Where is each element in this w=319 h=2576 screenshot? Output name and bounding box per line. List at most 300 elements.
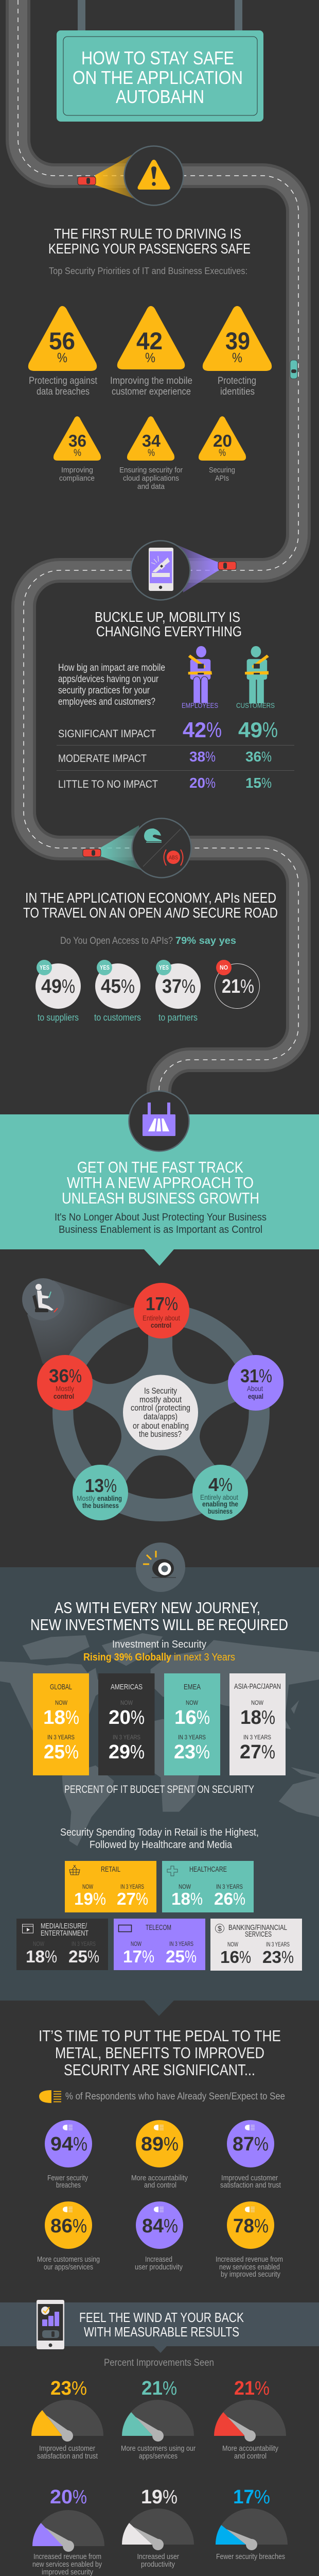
priority: data breaches: data breaches — [37, 386, 90, 397]
benefit: fewer breaches — [45, 2120, 92, 2190]
card: global: NOW — [55, 1699, 68, 1706]
title: AUTOBAHN — [116, 86, 204, 107]
heading: first rule — [48, 226, 251, 257]
table: impact: 38 — [189, 749, 205, 765]
subheading: enablement: It's No Longer About Just Protecting Your Business — [55, 1212, 267, 1223]
stat: partners: to partners — [158, 1012, 198, 1023]
headlight beam: purple — [178, 545, 219, 592]
node: entirely enabling: enabling the — [202, 1500, 238, 1508]
card: global — [33, 1673, 89, 1775]
card: telecom: 17 — [123, 1947, 142, 1966]
question: API access: Do You Open Access to APIs? — [60, 936, 173, 946]
card: media: MEDIA/LEISURE/ — [41, 1922, 87, 1930]
card: banking: % — [239, 1947, 251, 1967]
car: red — [78, 177, 96, 185]
caption: percent of IT budget: PERCENT OF IT BUDGET SPENT ON SECURITY — [64, 1784, 254, 1795]
subheading: investment: Rising 39% Globally — [83, 1652, 172, 1663]
car: red heading left — [218, 562, 236, 570]
gauge: user productivity — [122, 2486, 194, 2569]
benefit: accountability: 89 — [141, 2133, 164, 2155]
benefit: productivity: Increased — [145, 2255, 172, 2264]
card: global: IN 3 YEARS — [47, 1734, 75, 1741]
heading: APIs: IN THE APPLICATION ECONOMY, APIs NEED — [25, 890, 276, 906]
card: healthcare: HEALTHCARE — [189, 1865, 227, 1874]
car: teal — [290, 360, 297, 379]
card: retail: % — [136, 1889, 148, 1908]
card: americas: NOW — [120, 1699, 133, 1706]
title sign — [57, 0, 263, 122]
priority: data breaches: 56 — [49, 327, 75, 354]
gauge: fewer breaches: % — [254, 2486, 270, 2508]
benefit: productivity: user productivity — [135, 2263, 183, 2272]
stat: suppliers: 49 — [41, 976, 62, 997]
heading: pedal to the metal: IT’S TIME TO PUT THE PEDAL TO THE — [39, 2027, 281, 2045]
node: entirely enabling: 4 — [208, 1474, 219, 1495]
card: banking: NOW — [227, 1941, 238, 1948]
question text — [58, 663, 165, 707]
priority: APIs: Securing — [209, 466, 235, 474]
subheading: retail spending — [60, 1827, 259, 1851]
subheading: retail spending: Security Spending Today in Retail is the Highest, — [60, 1827, 259, 1838]
benefit: revenue: 78 — [233, 2215, 254, 2237]
card: Asia-Pac: 27 — [240, 1741, 261, 1763]
benefit: more customers: our apps/services — [44, 2263, 93, 2272]
subheading: enablement: Business Enablement is as Important as Control — [59, 1224, 262, 1235]
heading: first rule: THE FIRST RULE TO DRIVING IS — [54, 226, 241, 242]
card: americas: % — [131, 1707, 145, 1728]
heading: APIs — [23, 890, 278, 921]
gauge: fewer breaches — [216, 2486, 288, 2561]
legend: employees: EMPLOYEES — [182, 701, 218, 709]
card: healthcare: % — [190, 1889, 203, 1908]
gauge: customer satisfaction: Improved customer — [39, 2444, 95, 2453]
heading: fast track: UNLEASH BUSINESS GROWTH — [62, 1189, 259, 1207]
priority: APIs: APIs — [215, 474, 229, 483]
panel: investment band — [0, 1567, 319, 2001]
gauge: accountability — [214, 2378, 286, 2461]
priority: identities: 39 — [225, 327, 250, 354]
node: mostly enabling: enabling — [97, 1494, 122, 1502]
hub question: control (protecting — [131, 1403, 190, 1413]
card: global: 18 — [43, 1707, 65, 1728]
card: telecom: NOW — [131, 1940, 141, 1947]
node: mostly enabling: Mostly — [77, 1494, 95, 1502]
heading: fast track — [62, 1158, 259, 1207]
card: telecom: % — [142, 1947, 154, 1966]
gauge: more customers — [121, 2378, 196, 2461]
priority: cloud: cloud applications — [123, 474, 179, 483]
card: media: NOW — [33, 1940, 45, 1947]
table: impact: % — [262, 718, 278, 742]
question: API access: 79% say yes — [175, 936, 236, 946]
priority: data breaches: % — [57, 350, 67, 365]
card: Asia-Pac: % — [261, 1707, 275, 1728]
card: global: 25 — [44, 1741, 65, 1763]
card: banking: IN 3 YEARS — [266, 1941, 290, 1948]
benefit: accountability — [131, 2120, 188, 2190]
benefit: revenue: new services enabled — [219, 2263, 280, 2272]
node: entirely control: % — [165, 1293, 178, 1314]
hub question: data/apps) — [144, 1412, 178, 1421]
benefit: fewer breaches: % — [73, 2133, 87, 2155]
heading: fast track: GET ON THE FAST TRACK — [77, 1158, 243, 1176]
stat: customers — [94, 960, 141, 1023]
priority: APIs: % — [219, 448, 226, 459]
benefit: revenue: Increased revenue from — [216, 2255, 283, 2264]
table: impact — [57, 718, 294, 791]
question text: How big an impact are mobile — [58, 663, 165, 673]
priority: APIs — [199, 416, 246, 483]
node: about equal: % — [259, 1365, 272, 1386]
gauge: accountability: % — [255, 2378, 270, 2399]
gauge: user productivity: Increased user — [137, 2552, 179, 2561]
hub question: or about enabling — [133, 1421, 189, 1431]
table: impact: LITTLE TO NO IMPACT — [58, 778, 158, 790]
heading: first rule: KEEPING YOUR PASSENGERS SAFE — [48, 241, 251, 257]
panel: measurable results band — [0, 2302, 319, 2353]
benefit: customer satisfaction: Improved customer — [221, 2174, 278, 2182]
priority: mobile customer experience: customer experience — [112, 386, 191, 397]
benefit: accountability: More accountability — [131, 2174, 188, 2182]
node: entirely enabling: Entirely about — [200, 1493, 238, 1501]
table: impact: 49 — [238, 718, 262, 742]
car: red third — [83, 849, 101, 857]
stat: partners: % — [182, 976, 196, 997]
card: EMEA: IN 3 YEARS — [178, 1734, 206, 1741]
gauge: customer satisfaction: % — [72, 2378, 87, 2399]
card: global: % — [65, 1707, 79, 1728]
card: americas: IN 3 YEARS — [113, 1734, 140, 1741]
card: banking: SERVICES — [245, 1930, 272, 1939]
node: mostly enabling: the business — [82, 1501, 119, 1510]
node: entirely control: 17 — [146, 1293, 165, 1314]
world map — [0, 1633, 319, 1846]
panel: fast track band — [0, 1114, 319, 1266]
stat: partners — [155, 960, 201, 1023]
table: impact: 36 — [245, 749, 261, 765]
icon: warning sign circle — [125, 146, 183, 205]
card: Asia-Pac: 18 — [240, 1707, 261, 1728]
card: EMEA: 23 — [174, 1741, 196, 1763]
gauge: customer satisfaction: 23 — [50, 2378, 72, 2399]
subheading: priorities: Top Security Priorities of IT and Business Executives: — [49, 266, 247, 276]
node: mostly enabling: % — [104, 1475, 117, 1496]
node: entirely control: control — [151, 1321, 171, 1329]
priority: mobile customer experience — [110, 306, 192, 397]
gauge: customer satisfaction — [31, 2378, 103, 2461]
stat: customers: 45 — [101, 976, 121, 997]
node: about equal — [228, 1355, 283, 1411]
priority: APIs: 20 — [213, 431, 232, 450]
priority: mobile customer experience: Improving the mobile — [110, 376, 192, 386]
node: entirely enabling — [192, 1465, 248, 1520]
question text: security practices for your — [58, 685, 150, 696]
card: media — [16, 1919, 108, 1970]
stat: customers: % — [121, 976, 135, 997]
benefit: customer satisfaction: satisfaction and trust — [220, 2181, 281, 2190]
headlight beam: teal — [101, 825, 143, 871]
headlight beam: yellow — [95, 155, 135, 199]
card: media: 25 — [68, 1947, 87, 1966]
node: mostly control — [37, 1355, 93, 1411]
priority: mobile customer experience: % — [145, 350, 155, 365]
driver spotlight — [27, 1280, 134, 1364]
gauge: accountability: 21 — [234, 2378, 255, 2399]
card: Asia-Pac: % — [261, 1741, 275, 1763]
road — [18, 0, 298, 1103]
gauge: more customers: apps/services — [139, 2452, 178, 2461]
card: retail — [65, 1861, 156, 1912]
heading: wind at your back: FEEL THE WIND AT YOUR BACK — [79, 2310, 244, 2325]
priority: cloud: and data — [137, 482, 165, 491]
node: mostly control: Mostly — [56, 1384, 74, 1393]
benefit: more customers: 86 — [50, 2215, 73, 2237]
gauge: accountability: More accountability — [222, 2444, 278, 2453]
stat: customers: to customers — [94, 1012, 141, 1023]
gauge: revenue — [32, 2486, 104, 2576]
table: impact: 20 — [189, 775, 205, 791]
priority: data breaches: Protecting against — [29, 376, 98, 386]
table: impact: MODERATE IMPACT — [58, 753, 147, 765]
heading: new journey — [30, 1599, 288, 1634]
card: media: % — [45, 1947, 57, 1966]
subheading: investment: in next 3 Years — [174, 1652, 235, 1663]
card: americas: AMERICAS — [111, 1683, 143, 1691]
table: impact: % — [206, 718, 222, 742]
stat: partners: YES — [159, 964, 169, 971]
priority: identities: % — [232, 350, 242, 365]
table: impact: 42 — [183, 718, 206, 742]
icon: tire circle — [136, 1543, 185, 1592]
card: Asia-Pac: NOW — [251, 1699, 264, 1706]
stat: suppliers: YES — [40, 964, 49, 971]
card: healthcare: % — [233, 1889, 245, 1908]
title: HOW TO STAY SAFE — [81, 47, 234, 69]
gauge: accountability: and control — [234, 2452, 267, 2461]
card: EMEA: 16 — [174, 1707, 197, 1728]
benefit: revenue: % — [254, 2215, 269, 2237]
card: retail: IN 3 YEARS — [120, 1883, 144, 1890]
benefit: revenue: by improved security — [221, 2270, 280, 2279]
icon: employee figure — [188, 646, 212, 703]
stat: partners: 37 — [162, 976, 182, 997]
card: healthcare: 26 — [214, 1889, 233, 1908]
heading: pedal to the metal: METAL, BENEFITS TO IMPROVED — [55, 2044, 264, 2062]
benefit: more customers: More customers using — [37, 2255, 100, 2264]
icon: headlight legend — [39, 2090, 61, 2103]
gauge: more customers: More customers using our — [121, 2444, 196, 2453]
question text: employees and customers? — [58, 697, 155, 707]
benefit: customer satisfaction: % — [254, 2133, 269, 2155]
card: healthcare: IN 3 YEARS — [216, 1883, 243, 1890]
heading: new journey: AS WITH EVERY NEW JOURNEY, — [55, 1599, 260, 1617]
card: media: ENTERTAINMENT — [41, 1929, 88, 1938]
card: banking: 23 — [262, 1947, 281, 1967]
gauge: user productivity: productivity — [141, 2560, 175, 2569]
node: mostly control: 36 — [49, 1365, 69, 1386]
icon: highway sign circle — [129, 1091, 189, 1151]
benefit: accountability: and control — [144, 2181, 176, 2190]
title: ON THE APPLICATION — [73, 67, 243, 88]
icon: helmet and ABS circle — [132, 818, 191, 878]
gauge: fewer breaches: 17 — [233, 2486, 254, 2508]
card: media: 18 — [26, 1947, 45, 1966]
card: telecom: 25 — [166, 1947, 185, 1966]
heading: APIs: TO TRAVEL ON AN OPEN AND SECURE ROAD — [23, 905, 278, 921]
icon: driver — [22, 1278, 64, 1320]
gauge: more customers: % — [163, 2378, 177, 2399]
priority: compliance: compliance — [59, 474, 95, 483]
node: entirely enabling: business — [208, 1507, 233, 1515]
card: americas: % — [130, 1741, 145, 1763]
stat: customers: YES — [100, 964, 110, 971]
card: banking: $ — [218, 1924, 222, 1933]
gauge: customer satisfaction: satisfaction and trust — [37, 2452, 98, 2461]
hub question: the business? — [139, 1429, 182, 1439]
icon: helmet and ABS circle: ABS — [169, 855, 178, 861]
node: about equal: About — [247, 1384, 263, 1393]
node: mostly control: control — [54, 1392, 74, 1400]
subheading: investment — [83, 1639, 235, 1663]
card: banking: % — [281, 1947, 294, 1967]
card: EMEA — [164, 1673, 220, 1775]
node: about equal: 31 — [240, 1365, 259, 1386]
stat: suppliers: % — [62, 976, 75, 997]
legend text: respondents: % of Respondents who have Already Seen/Expect to See — [65, 2091, 285, 2102]
priority: compliance: % — [74, 448, 81, 459]
benefit: fewer breaches: Fewer security — [47, 2174, 88, 2182]
node: entirely enabling: % — [219, 1474, 233, 1495]
stat: no: NO — [220, 964, 228, 971]
stat: no: 21 — [222, 976, 240, 997]
node: entirely control: Entirely about — [143, 1314, 180, 1322]
table: impact: 15 — [245, 775, 261, 791]
heading: buckle up — [95, 609, 242, 639]
icon: customer figure — [245, 646, 269, 703]
node: mostly control: % — [69, 1365, 82, 1386]
priority: compliance: Improving — [61, 466, 93, 474]
card: telecom: % — [185, 1947, 197, 1966]
priority: mobile customer experience: 42 — [136, 327, 163, 354]
stat: suppliers — [36, 960, 81, 1023]
gauge: revenue: new services enabled by — [32, 2560, 102, 2569]
priority: cloud: Ensuring security for — [119, 466, 183, 474]
hub question: Is Security — [144, 1386, 177, 1396]
icon: phone with dashboard — [37, 2300, 64, 2349]
card: retail: RETAIL — [101, 1865, 120, 1874]
node: about equal: equal — [248, 1392, 263, 1400]
subheading: enablement — [55, 1212, 267, 1235]
card: global: GLOBAL — [50, 1683, 72, 1691]
priority: identities: identities — [220, 386, 255, 397]
card: media: IN 3 YEARS — [72, 1940, 96, 1947]
benefit: productivity: % — [164, 2215, 178, 2237]
question text: apps/devices having on your — [58, 674, 159, 685]
gauge: user productivity: 19 — [141, 2486, 163, 2508]
pointer: slate band — [144, 2001, 174, 2016]
card: telecom — [114, 1919, 205, 1970]
table: impact: % — [205, 775, 216, 791]
stat: no: % — [240, 976, 254, 997]
benefit: customer satisfaction: 87 — [233, 2133, 254, 2155]
card: telecom: IN 3 YEARS — [169, 1940, 193, 1947]
card: banking: BANKING/FINANCIAL — [228, 1923, 287, 1932]
table: impact: % — [261, 749, 272, 765]
priority: compliance — [54, 416, 101, 483]
card: banking — [210, 1919, 302, 1971]
card: EMEA: % — [197, 1707, 210, 1728]
heading: wind at your back — [79, 2310, 244, 2340]
card: retail: % — [93, 1889, 106, 1908]
subheading: retail spending: Followed by Healthcare and Media — [90, 1839, 233, 1851]
gauge: user productivity: % — [163, 2486, 178, 2508]
gauge: fewer breaches: Fewer security breaches — [216, 2552, 285, 2561]
stat: suppliers: to suppliers — [38, 1012, 79, 1023]
heading: buckle up: CHANGING EVERYTHING — [96, 623, 242, 639]
card: americas: 20 — [109, 1707, 131, 1728]
benefit: more customers: % — [73, 2215, 87, 2237]
heading: pedal to the metal — [39, 2027, 281, 2079]
benefit: fewer breaches: breaches — [56, 2181, 81, 2190]
heading: buckle up: BUCKLE UP, MOBILITY IS — [95, 609, 240, 625]
card: EMEA: NOW — [186, 1699, 199, 1706]
priority: cloud — [119, 416, 183, 491]
card: retail: 27 — [117, 1889, 136, 1908]
benefit: productivity — [135, 2201, 183, 2272]
card: healthcare: 18 — [171, 1889, 190, 1908]
icon: phone with seat belt — [131, 541, 190, 600]
card: Asia-Pac: ASIA-PAC/JAPAN — [234, 1682, 281, 1691]
node: entirely control — [134, 1283, 189, 1338]
stat: no — [215, 960, 259, 1009]
gauge: more customers: 21 — [141, 2378, 163, 2399]
gauge: revenue: Increased revenue from — [33, 2552, 101, 2561]
card: global: % — [65, 1741, 79, 1763]
benefit: revenue — [216, 2201, 283, 2279]
heading: fast track: WITH A NEW APPROACH TO — [67, 1174, 254, 1192]
benefit: productivity: 84 — [142, 2215, 164, 2237]
benefit: fewer breaches: 94 — [50, 2133, 73, 2155]
hub question: mostly about — [139, 1395, 182, 1404]
benefit: customer satisfaction — [220, 2120, 281, 2190]
table: impact: % — [261, 775, 272, 791]
card: retail: 19 — [74, 1889, 93, 1908]
card: EMEA: EMEA — [184, 1683, 201, 1691]
priority: compliance: 36 — [68, 431, 86, 450]
card: EMEA: % — [196, 1741, 210, 1763]
subheading: investment: Investment in Security — [112, 1639, 206, 1650]
card: banking: 16 — [220, 1947, 239, 1967]
title — [73, 47, 243, 107]
gauge: revenue: % — [73, 2486, 87, 2508]
card: healthcare: NOW — [179, 1883, 191, 1890]
priority: identities: Protecting — [218, 376, 256, 386]
hub question — [123, 1375, 198, 1450]
node: mostly enabling — [73, 1465, 128, 1520]
legend: customers: CUSTOMERS — [236, 701, 275, 709]
table: impact: % — [205, 749, 216, 765]
card: healthcare — [162, 1861, 254, 1912]
card: americas — [98, 1673, 154, 1775]
heading: pedal to the metal: SECURITY ARE SIGNIFICANT... — [64, 2061, 255, 2079]
chart: steering wheel — [37, 1283, 283, 1521]
card: retail: NOW — [82, 1883, 93, 1890]
priority: data breaches — [28, 306, 98, 397]
card: telecom: TELECOM — [146, 1923, 171, 1932]
card: media: % — [87, 1947, 99, 1966]
table: impact: SIGNIFICANT IMPACT — [58, 728, 156, 740]
card: americas: 29 — [109, 1741, 130, 1763]
